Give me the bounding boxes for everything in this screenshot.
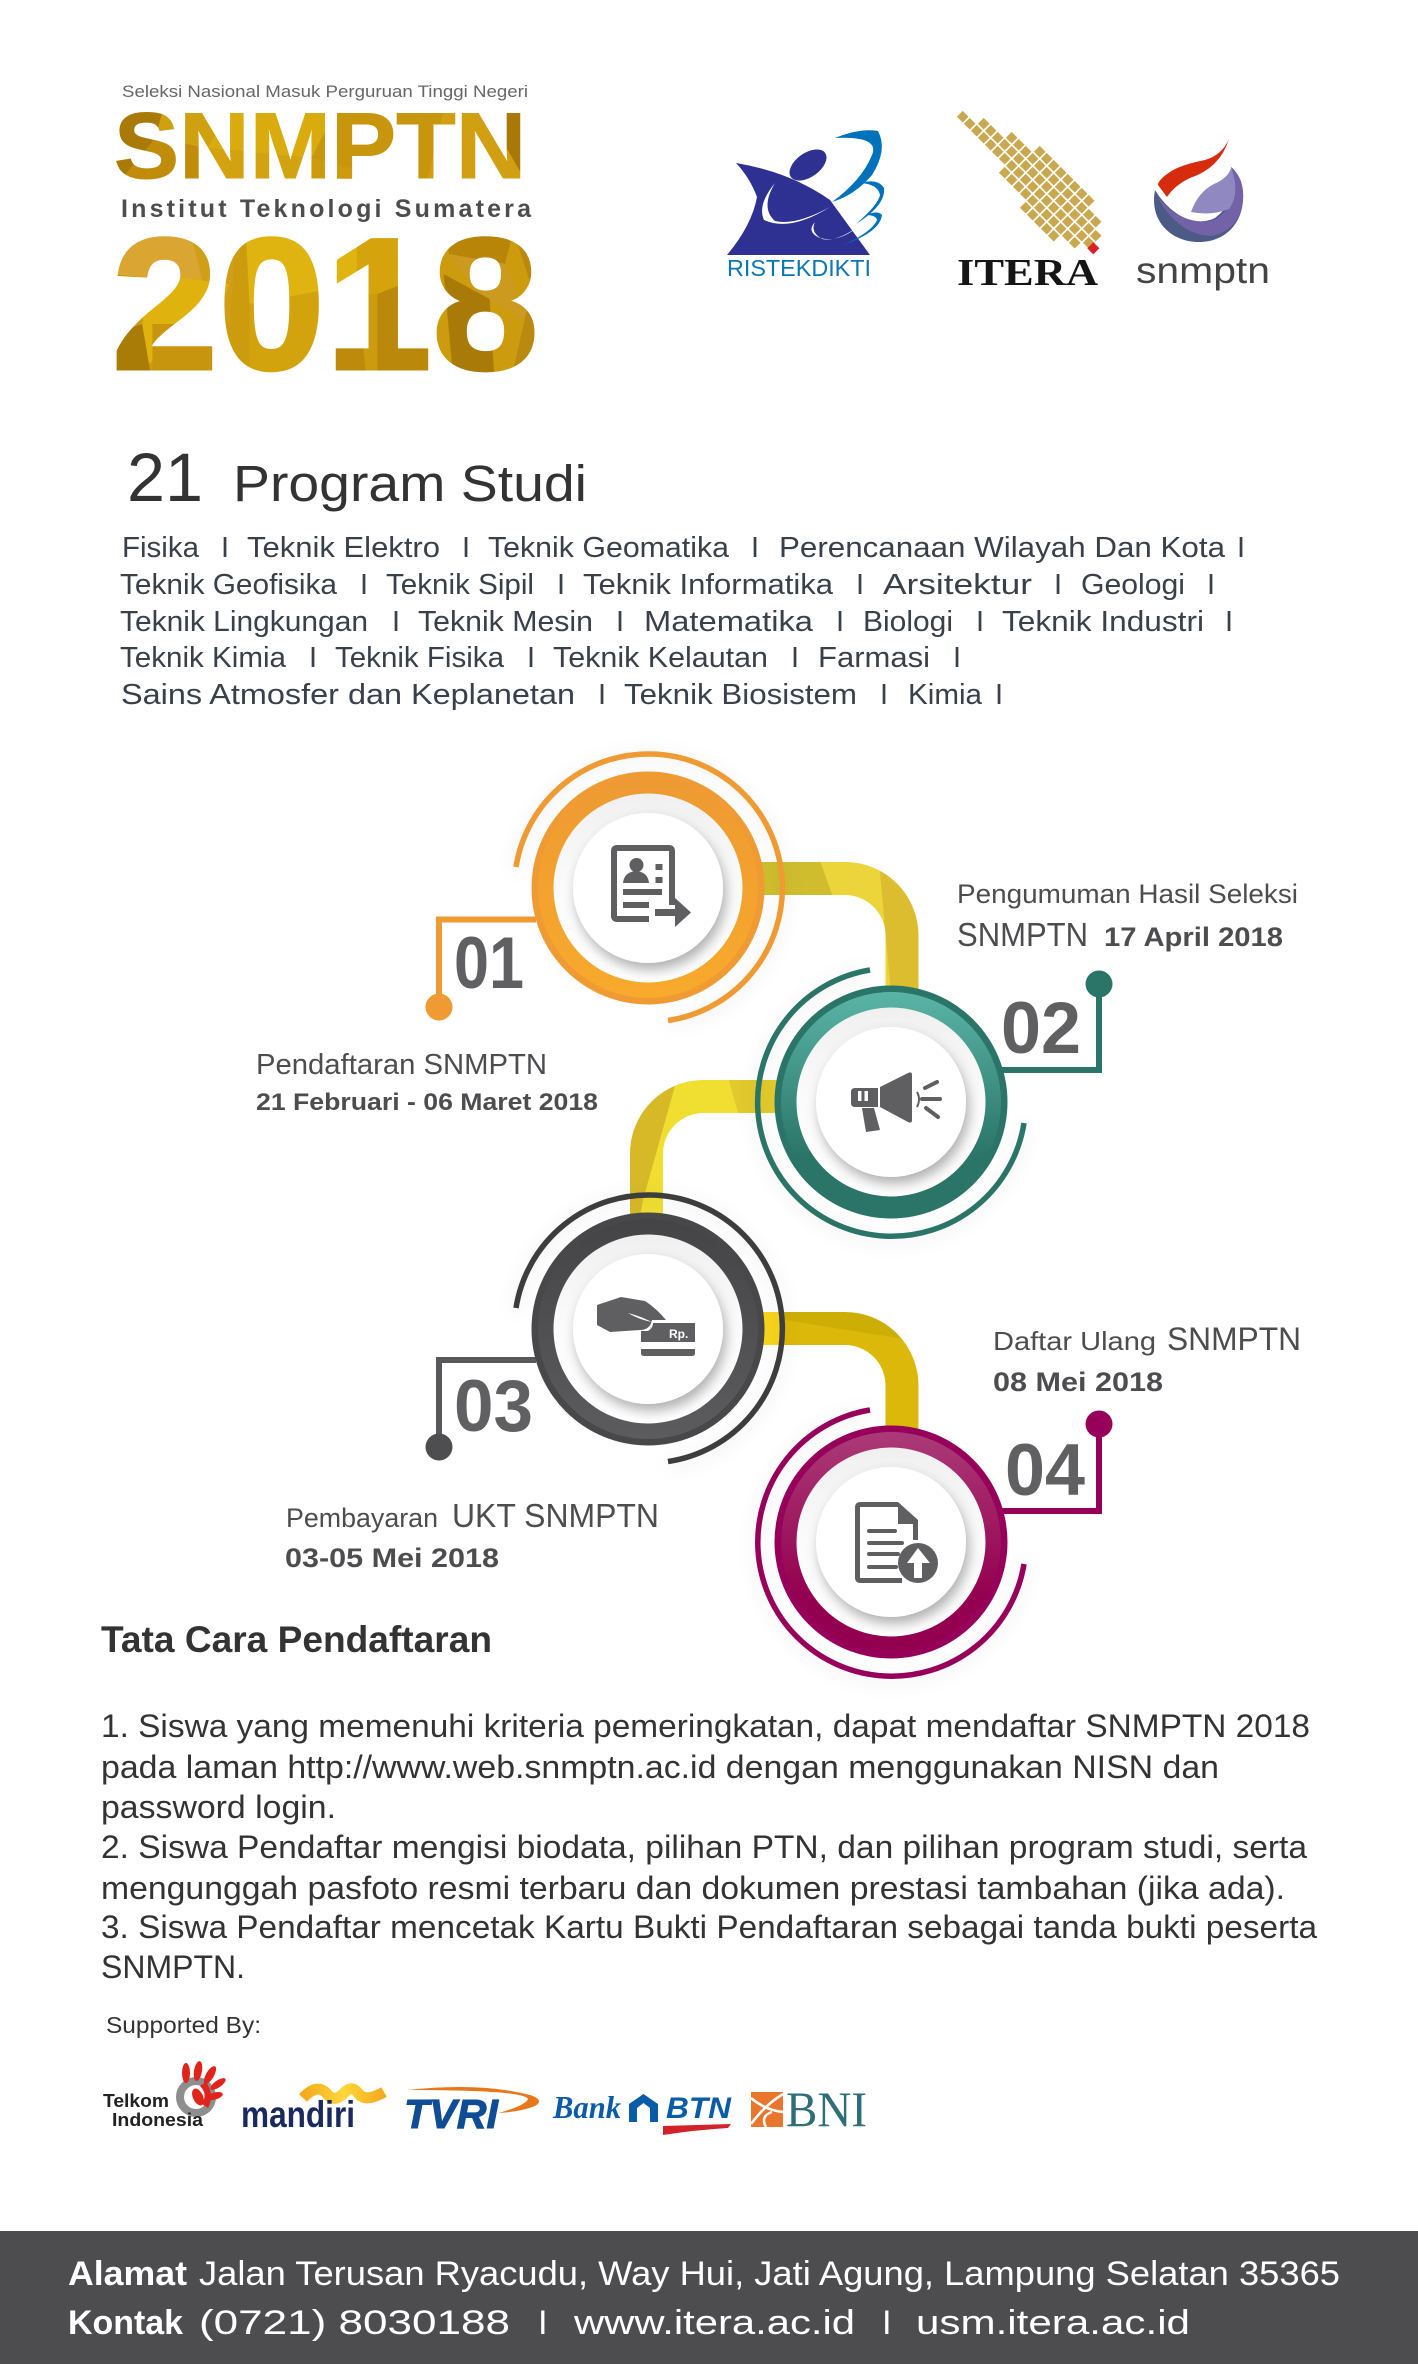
step 4 [758,1321,1301,1676]
program list: I [360,569,368,601]
program list: I [557,569,565,601]
program list: I [462,532,470,564]
ristekdikti white swooshes [762,183,830,224]
program list: Teknik Geomatika [488,532,730,564]
step 1 [256,754,782,1116]
snmptn red flame [1158,139,1229,197]
program list: I [392,606,400,638]
ristekdikti blue arcs [832,130,882,202]
step 4 ring [774,1426,1008,1658]
step 3 dot [426,1434,452,1460]
instructions text: SNMPTN. [101,1949,245,1985]
step 3 label: 03-05 Mei 2018 [285,1543,499,1573]
bni text: BNI [786,2081,867,2137]
tvri swoosh [407,2087,539,2113]
step 2 number: 02 [1001,988,1081,1069]
step 3 [285,1195,782,1573]
connector pipe 1 to 2 [762,862,918,989]
step 3 icon: payment card [597,1297,695,1356]
step 4 label: 08 Mei 2018 [993,1367,1163,1397]
program list: I [309,642,317,674]
program list: I [976,606,984,638]
program list: I [616,606,624,638]
program list: I [751,532,759,564]
step 1 label: Pendaftaran SNMPTN [256,1049,547,1081]
footer contact: usm.itera.ac.id [916,2304,1190,2342]
program list: I [1054,569,1062,601]
program list: Teknik Elektro [247,532,440,564]
instructions text [101,1708,1318,1985]
bni orange mark [751,2092,783,2127]
sponsor: Telkom Indonesia [103,2060,227,2130]
step 4 icon: document upload [858,1502,938,1583]
step 2 icon: megaphone [851,1072,940,1132]
program list: Farmasi [818,642,930,674]
institute name: Institut Teknologi Sumatera [121,195,532,223]
program list: Teknik Fisika [335,642,505,674]
program list: Teknik Biosistem [624,679,857,711]
step 4 leader [1000,1430,1099,1511]
sponsor: mandiri [241,2089,384,2135]
step 4 label: Daftar Ulang [993,1326,1156,1356]
ristekdikti head [784,143,832,187]
snmptn bowl [1154,167,1243,242]
step 4 dot [1086,1410,1112,1438]
step 1 dot [426,994,452,1020]
bni mark lines [751,2094,783,2127]
logo: SNMPTN 2018 wordmark [112,82,539,410]
program list: I [1237,532,1245,564]
program list: Teknik Geofisika [120,569,338,601]
heading: 21 Program Studi: Program Studi [233,455,587,512]
connector pipe 3 to 4 [763,1312,918,1429]
snmptn light flame [1191,168,1235,213]
instructions text: 3. Siswa Pendaftar mencetak Kartu Bukti Pendaftaran sebagai tanda bukti peserta [101,1909,1318,1945]
instructions text: mengunggah pasfoto resmi terbaru dan dokumen prestasi tambahan (jika ada). [101,1870,1285,1906]
program list: I [791,642,799,674]
itera red diamond [1087,242,1099,254]
instructions text: password login. [101,1789,336,1825]
program list [120,532,1245,711]
sponsor: TVRI [404,2087,539,2137]
step 3 label: UKT SNMPTN [452,1497,659,1534]
program list: Teknik Mesin [418,606,593,638]
telkom hand [182,2060,227,2108]
program list: I [880,679,888,711]
step 1 icon: registration card [614,848,691,927]
step 1 label [256,1049,598,1116]
itera sumatra diamonds [960,114,1099,246]
program list: Teknik Industri [1002,606,1204,638]
step 2 dot [1086,970,1112,998]
step 3 icon: payment card: Rp. [669,1327,688,1341]
program list: I [1207,569,1215,601]
mandiri wave [303,2089,384,2098]
step 1 label: 21 Februari - 06 Maret 2018 [256,1089,598,1116]
logo: ITERA [957,114,1099,294]
program list: Arsitektur [883,569,1032,601]
program list: Perencanaan Wilayah Dan Kota [779,532,1226,564]
sponsor: Bank BTN [552,2089,732,2135]
step 4 outer arc [758,1410,1024,1676]
ristekdikti text: RISTEKDIKTI [727,255,871,281]
heading: 21 Program Studi: 21 [127,439,203,516]
step 4 label [993,1321,1301,1397]
program list: Kimia [908,679,983,711]
btn house icon [629,2094,658,2122]
supported by label: Supported By: [106,2012,261,2038]
mandiri text: mandiri [241,2094,355,2135]
tagline: Seleksi Nasional Masuk Perguruan Tinggi Negeri [122,82,528,101]
program list: Teknik Lingkungan [120,606,368,638]
heading: Tata Cara Pendaftaran: Tata Cara Pendaftaran [101,1619,492,1660]
program list: Sains Atmosfer dan Keplanetan [121,679,575,711]
program list: I [598,679,606,711]
step 2 label [957,879,1298,954]
step 4 label: SNMPTN [1167,1321,1301,1357]
itera text: ITERA [957,252,1099,294]
step 2 ring [774,986,1008,1218]
program list: I [995,679,1003,711]
footer contact: I [882,2304,892,2342]
step 3 leader [439,1360,536,1440]
footer bar [0,2231,1418,2364]
program list: I [527,642,535,674]
step 1 ring [532,772,764,1004]
step 3 ring [532,1212,764,1446]
footer contact [68,2304,1190,2342]
program list: I [836,606,844,638]
footer contact: (0721) 8030188 [199,2304,510,2342]
program list: I [856,569,864,601]
instructions text: 1. Siswa yang memenuhi kriteria pemeringkatan, dapat mendaftar SNMPTN 2018 [101,1708,1310,1744]
program list: Fisika [122,532,200,564]
instructions text: 2. Siswa Pendaftar mengisi biodata, pilihan PTN, dan pilihan program studi, serta [101,1829,1308,1865]
snmptn purple crescent [1157,167,1243,236]
step 4 number: 04 [1005,1430,1085,1511]
program list: Teknik Kimia [120,642,287,674]
snmptn text: snmptn [1136,250,1270,291]
sponsor: BNI [751,2081,867,2137]
connector pipe 2 to 3 [630,1080,777,1214]
btn red swoosh [663,2124,731,2135]
program list: I [953,642,961,674]
ristekdikti navy body [727,163,870,255]
step 3 outer arc [516,1195,782,1462]
step 2 [758,879,1298,1236]
step 2 label: SNMPTN [957,917,1088,954]
step 3 label: Pembayaran [286,1503,438,1533]
program list: Teknik Informatika [583,569,834,601]
program list: Biologi [863,606,953,638]
instructions text: pada laman http://www.web.snmptn.ac.id dengan menggunakan NISN dan [101,1749,1219,1785]
step 2 label: 17 April 2018 [1104,922,1283,952]
year 2018: 2018 [112,200,539,410]
step 2 outer arc [758,970,1024,1236]
step 1 leader [439,920,536,1000]
footer address: Jalan Terusan Ryacudu, Way Hui, Jati Agung, Lampung Selatan 35365 [199,2255,1340,2293]
step 1 outer arc [516,754,782,1020]
program list: Geologi [1081,569,1185,601]
step 2 label: Pengumuman Hasil Seleksi [957,879,1298,909]
program list: Teknik Sipil [386,569,534,601]
program list: Matematika [644,606,814,638]
telkom ring [180,2081,212,2113]
program list: I [221,532,229,564]
heading: 21 Program Studi [127,439,587,516]
footer contact: I [538,2304,548,2342]
wordmark SNMPTN: SNMPTN [114,94,526,199]
step 3 label [285,1497,659,1573]
btn letters: BTN [666,2092,732,2125]
sponsor: Telkom Indonesia: Indonesia [112,2110,204,2130]
btn bank text: Bank [552,2089,621,2125]
footer contact: Kontak [68,2304,184,2342]
tvri text: TVRI [404,2091,500,2137]
program list: Teknik Kelautan [553,642,768,674]
logo: Ristekdikti [727,130,884,281]
program list: I [1225,606,1233,638]
footer address: Alamat [68,2255,188,2293]
step 3 number: 03 [454,1366,533,1447]
footer contact: www.itera.ac.id [573,2304,855,2342]
logo: snmptn [1136,139,1270,291]
step 1 number: 01 [454,923,524,1004]
step 2 leader [1000,990,1099,1070]
telkom text: Telkom [103,2091,169,2111]
